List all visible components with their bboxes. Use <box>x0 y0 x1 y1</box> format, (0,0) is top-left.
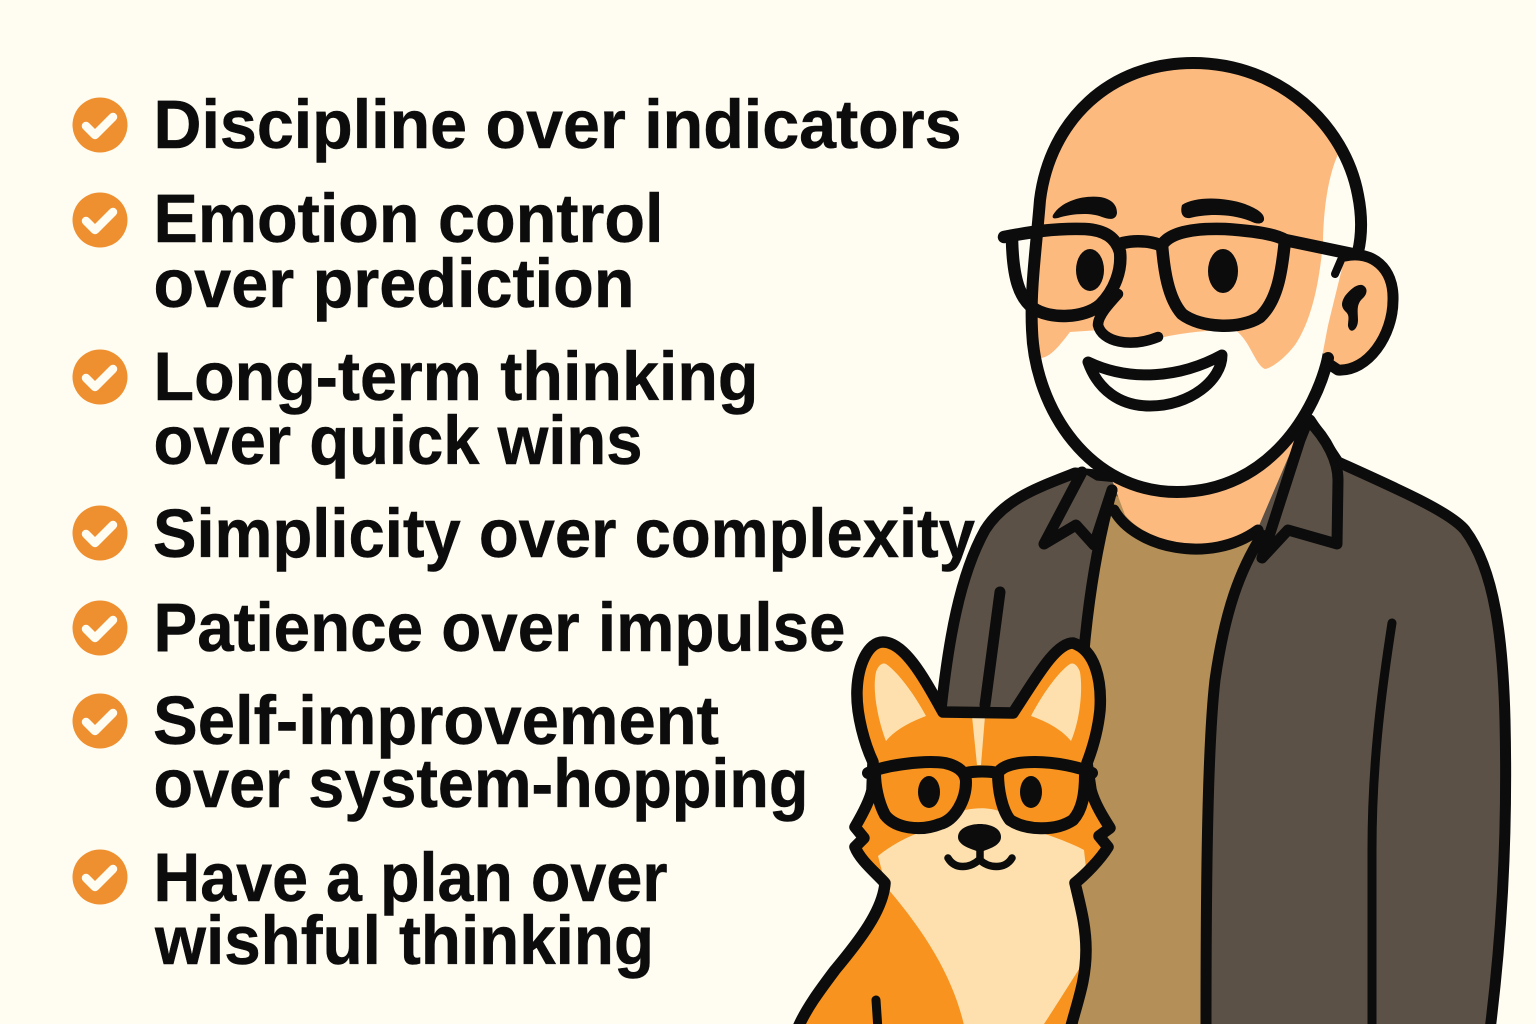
item: have a plan over wishful thinking <box>72 839 668 979</box>
item: have a plan over wishful thinking: Have a plan over <box>154 839 668 916</box>
cat: muzzle and chest cream <box>878 808 1086 960</box>
man: glasses <box>1004 229 1352 326</box>
cat: glasses <box>868 762 1092 828</box>
man: left eyebrow <box>1053 197 1117 219</box>
man: shirt <box>1078 495 1262 1024</box>
cat: leg line <box>876 1000 878 1024</box>
cat: nose <box>958 824 1001 852</box>
man: smile <box>1088 355 1222 406</box>
man: neck <box>1112 437 1297 544</box>
cat: left inner ear <box>875 663 926 741</box>
item: have a plan over wishful thinking: wishful thinking <box>154 902 654 979</box>
item: long-term thinking over quick wins: over quick wins <box>154 402 642 479</box>
man: collar and neckline lines <box>985 420 1392 1024</box>
item: emotion control over prediction <box>72 180 664 322</box>
man: temple tick near ear <box>1335 260 1341 274</box>
item: self-improvement over system-hopping: Self-improvement <box>153 682 719 759</box>
item: emotion control over prediction: over prediction <box>154 245 634 322</box>
man: ear <box>1320 255 1393 370</box>
item: patience over impulse: Patience over impulse <box>154 589 846 666</box>
cat: right inner ear <box>1031 663 1081 741</box>
item: self-improvement over system-hopping <box>72 682 808 822</box>
man: right eyebrow <box>1181 198 1264 224</box>
item: self-improvement over system-hopping: over system-hopping <box>154 745 808 822</box>
item: discipline over indicators: Discipline over indicators <box>154 86 962 163</box>
cat: head <box>797 642 1110 1024</box>
man: jacket <box>940 420 1506 1024</box>
item: long-term thinking over quick wins <box>72 338 758 479</box>
item: long-term thinking over quick wins: Long-term thinking <box>154 338 758 415</box>
cat: forehead stripe <box>972 716 985 765</box>
cat: mouth <box>948 848 1012 866</box>
man: eyes <box>1076 249 1238 293</box>
man: skin of face <box>1038 69 1338 369</box>
man: head outline <box>1032 63 1361 492</box>
checklist <box>72 86 975 979</box>
cat: eyes <box>918 776 1042 808</box>
cat: head and body outline <box>797 642 1110 1024</box>
cat: body <box>797 883 1086 1024</box>
cat illustration <box>797 642 1110 1024</box>
man illustration <box>940 50 1506 1024</box>
item: simplicity over complexity: Simplicity over complexity <box>153 495 975 572</box>
item: emotion control over prediction: Emotion control <box>154 180 664 257</box>
man: nose <box>1098 294 1158 343</box>
man: head <box>1020 50 1361 492</box>
cat: chest <box>890 885 1080 1024</box>
